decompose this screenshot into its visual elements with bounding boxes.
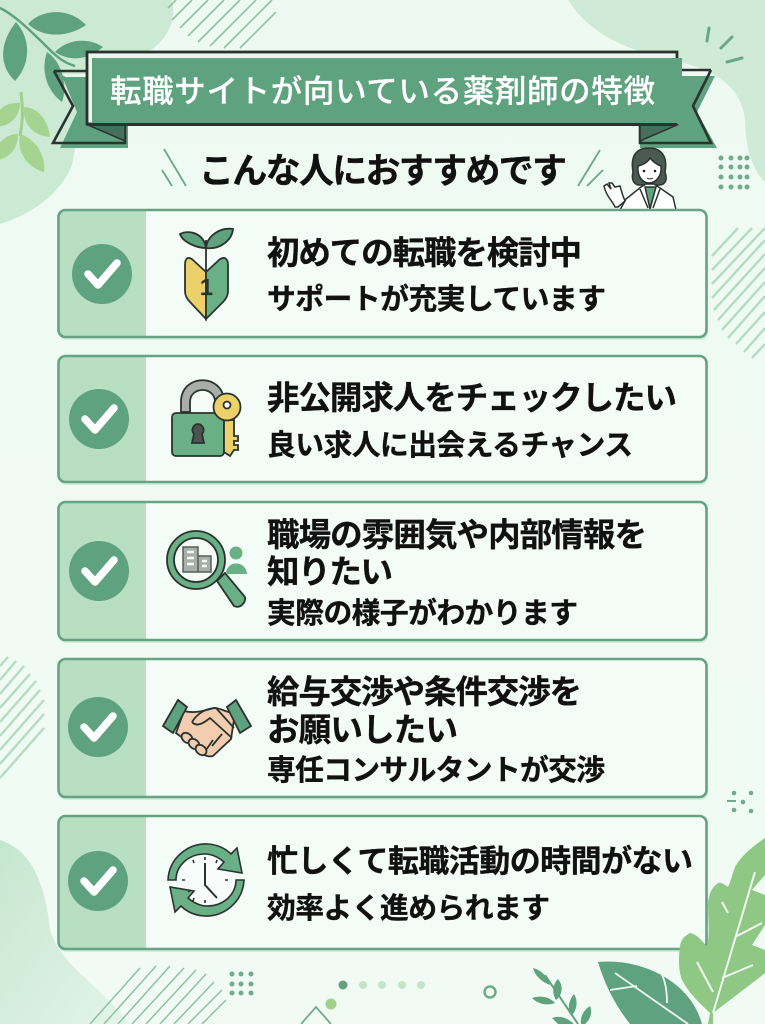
card 5 subtext: 効率よく進められます xyxy=(267,893,550,925)
icon: handshake xyxy=(163,700,251,757)
card 1 xyxy=(58,210,708,340)
icon: beginner sprout xyxy=(180,229,233,319)
accent marks: top right xyxy=(707,28,742,62)
card 4 subtext: 専任コンサルタントが交渉 xyxy=(267,754,605,787)
card 5 xyxy=(58,816,708,952)
card 1 heading: 初めての転職を検討中 xyxy=(267,235,582,271)
card panel xyxy=(58,816,708,952)
check badge xyxy=(69,389,129,449)
check badge xyxy=(72,244,132,304)
card 1 subtext: サポートが充実しています xyxy=(267,283,606,316)
icon: padlock and key xyxy=(172,380,240,456)
leaf: small sprig xyxy=(532,968,591,1024)
stripes: left xyxy=(0,657,44,778)
card 4 xyxy=(58,659,708,800)
stripes: right xyxy=(712,228,765,358)
page indicator dots xyxy=(338,980,425,990)
check badge xyxy=(69,541,129,601)
ribbon tails xyxy=(53,70,717,148)
subheading marks xyxy=(162,149,603,186)
ribbon body xyxy=(87,52,677,124)
card 4 heading: 給与交渉や条件交渉を xyxy=(267,674,582,710)
card 3 subtext: 実際の様子がわかります xyxy=(267,597,578,630)
card 2 xyxy=(58,356,708,485)
title ribbon xyxy=(53,52,717,148)
leaf: large dark xyxy=(598,962,702,1024)
ring and triangle ornaments xyxy=(301,986,496,1024)
icon: pharmacist xyxy=(604,148,676,210)
card 3 heading: 職場の雰囲気や内部情報を xyxy=(267,517,647,553)
scattered dots xyxy=(727,791,753,813)
subheading text: こんな人におすすめです xyxy=(199,152,567,191)
title text: 転職サイトが向いている薬剤師の特徴 xyxy=(110,73,655,109)
card 3 xyxy=(58,502,708,643)
stripes: bottom xyxy=(90,966,226,1024)
check badge xyxy=(68,697,128,757)
icon: beginner sprout: 1 xyxy=(200,274,213,300)
icon: clock with arrows xyxy=(168,844,244,916)
leaves: dark branch xyxy=(0,8,103,102)
check badge xyxy=(68,851,128,911)
card panel xyxy=(58,356,708,485)
dot grid: bottom xyxy=(230,972,254,996)
card 2 heading: 非公開求人をチェックしたい xyxy=(267,380,677,416)
leaves: light branch xyxy=(0,92,50,172)
subheading group xyxy=(162,149,603,191)
card panel xyxy=(58,659,708,800)
card panel xyxy=(58,210,708,340)
dot grid: top right xyxy=(718,156,750,190)
card 2 subtext: 良い求人に出会えるチャンス xyxy=(267,430,633,462)
icon: magnifier with building xyxy=(167,531,247,607)
card 4: お願いしたい xyxy=(267,712,458,748)
stripes: top xyxy=(168,0,276,48)
card 5 heading: 忙しくて転職活動の時間がない xyxy=(267,844,693,879)
card 3: 知りたい xyxy=(267,554,393,590)
card panel xyxy=(58,502,708,643)
leaf: large light xyxy=(679,838,765,1024)
